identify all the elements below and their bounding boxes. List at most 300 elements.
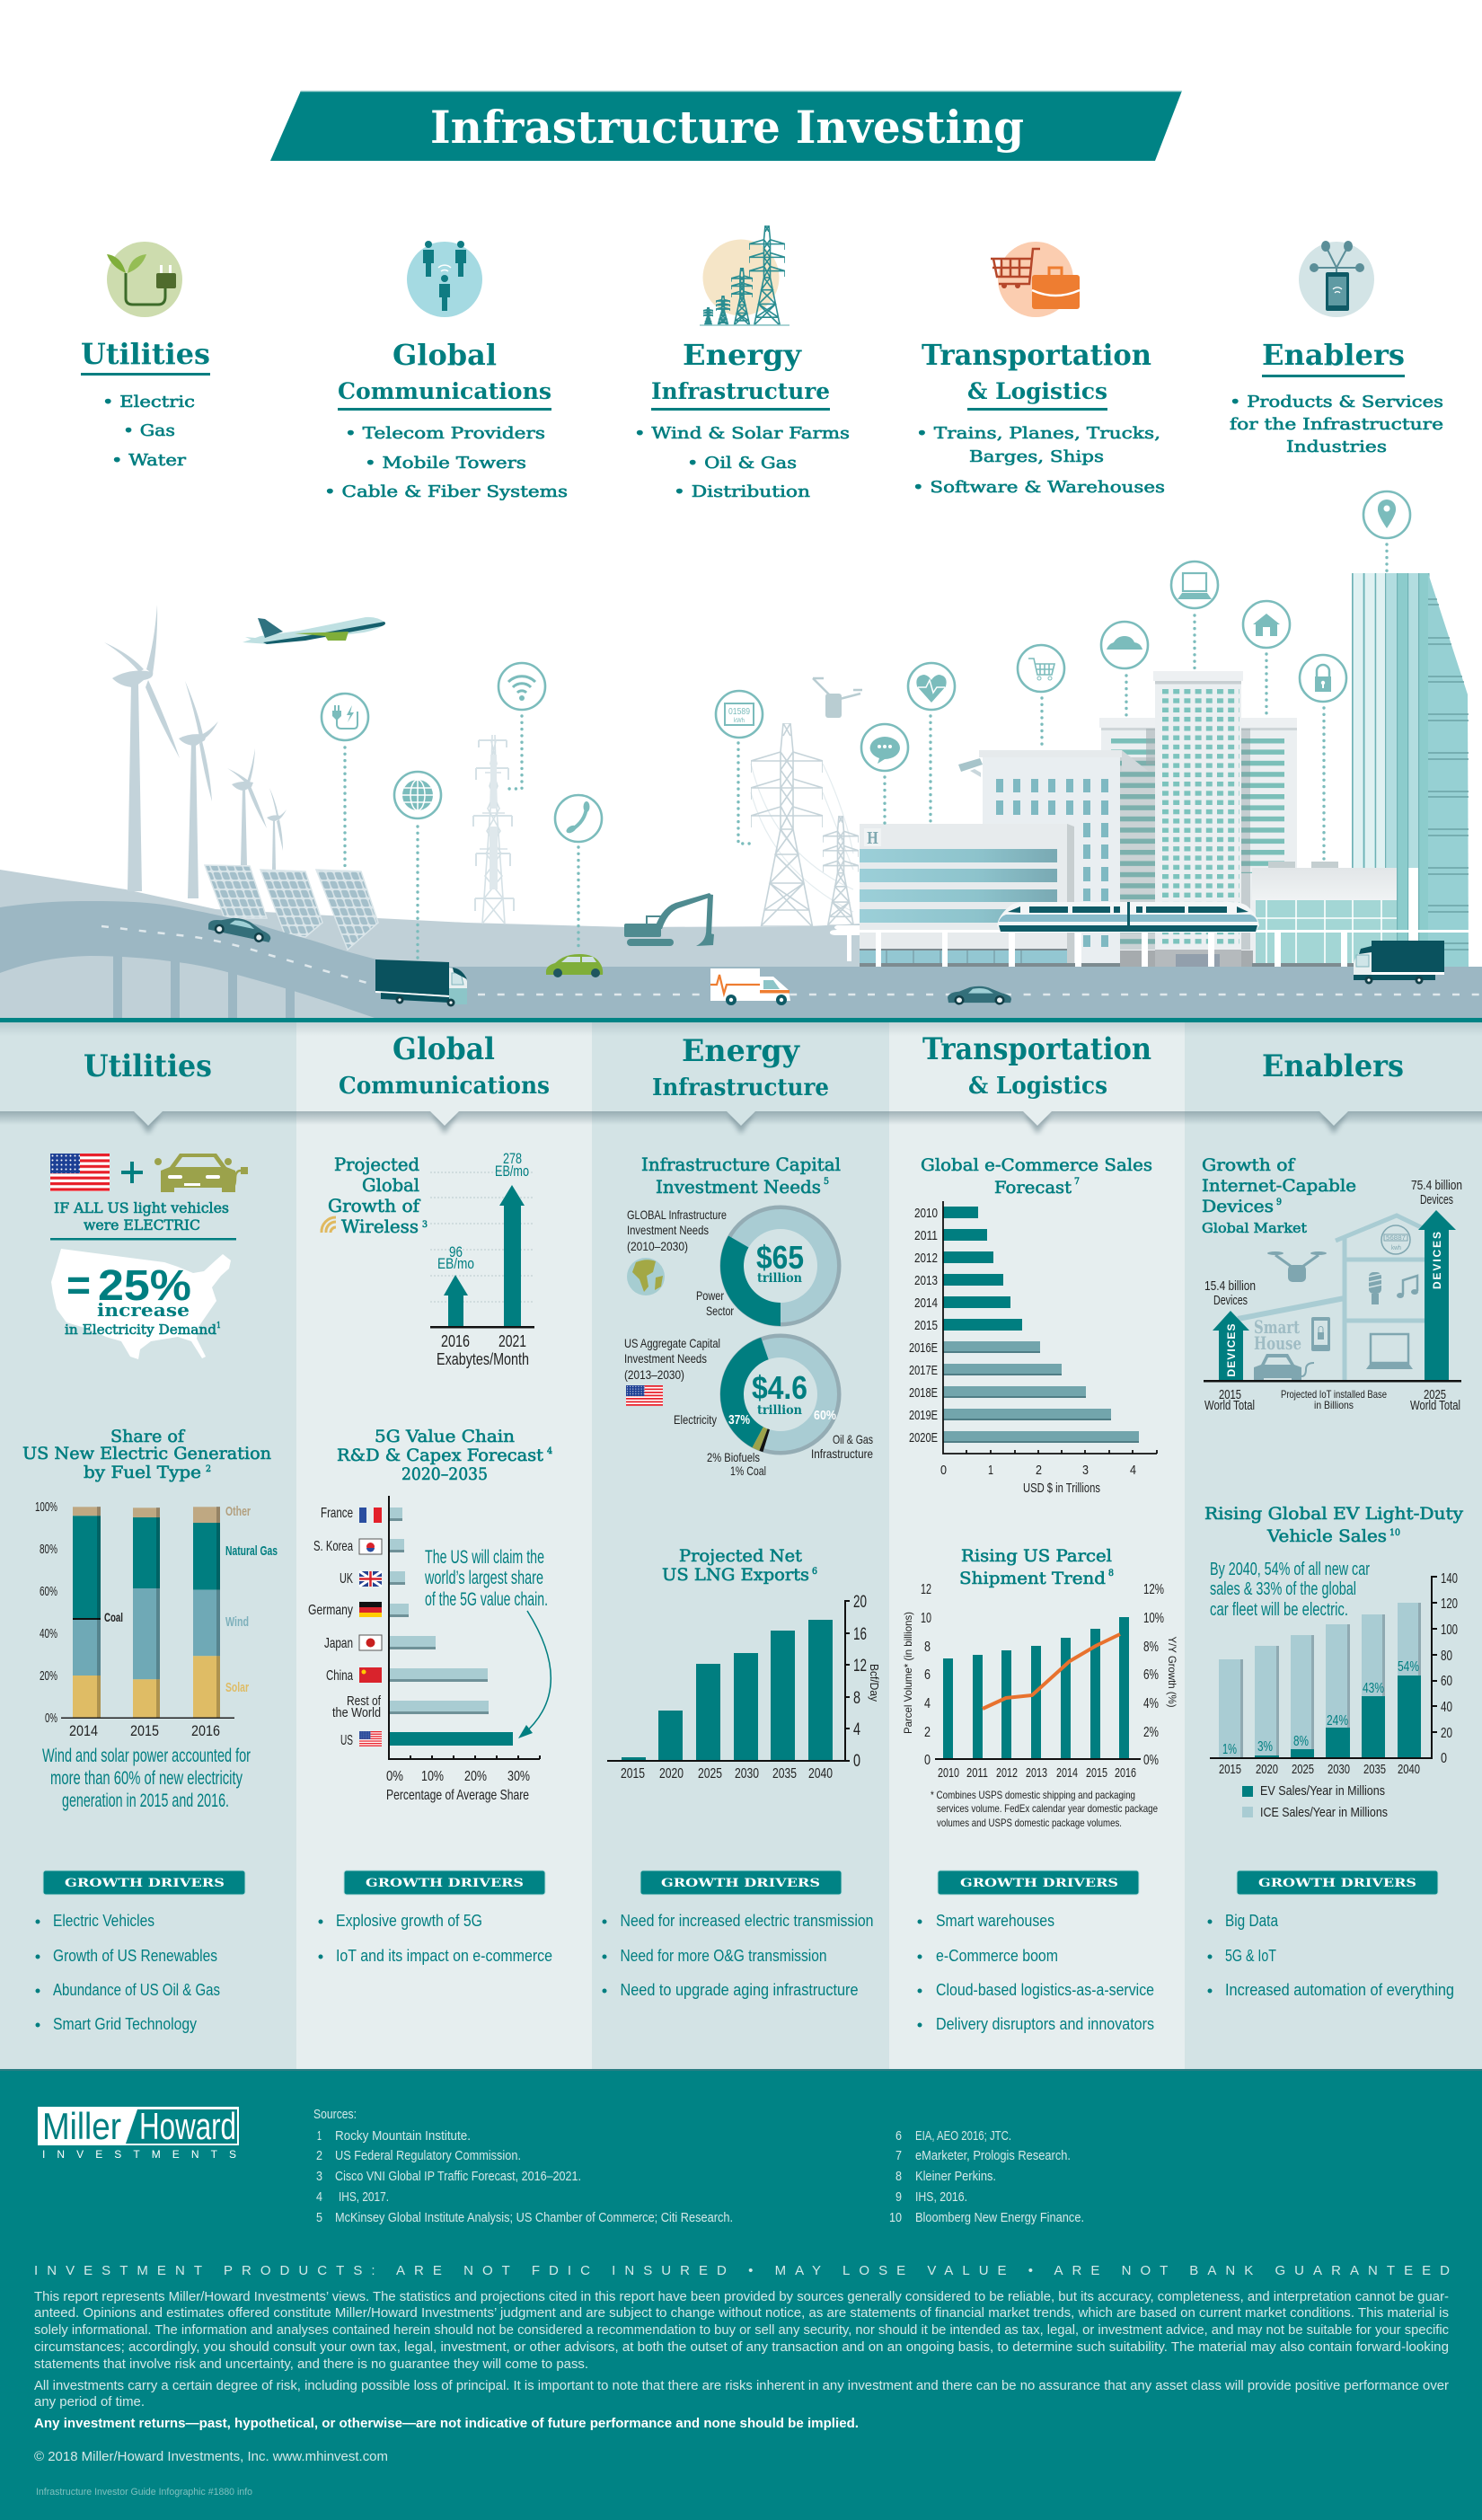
right axis labels: 6% xyxy=(1143,1667,1159,1683)
series labels and axis: 2014 xyxy=(69,1722,98,1739)
right axis labels: 2% xyxy=(1143,1725,1159,1740)
donut 2 labels: US Aggregate Capital xyxy=(624,1336,720,1350)
chart title: 4 xyxy=(547,1446,552,1456)
country labels: the World xyxy=(332,1705,381,1720)
logo: INVESTMENTS xyxy=(42,2148,236,2161)
vehicle: truck right xyxy=(1354,941,1444,985)
callout: By 2040, 54% of all new car xyxy=(1210,1560,1370,1579)
sources column 1: 2 xyxy=(316,2148,322,2163)
disclosure: All investments carry a certain degree of risk, including possible loss of principal. It is important to note that there are risks inherent in any investment and there can be no assurance that any asset class will provide positive performance over xyxy=(34,2379,1449,2393)
list: • Distribution xyxy=(674,482,810,501)
lock phone xyxy=(1311,1317,1330,1351)
chart title: Rising Global EV Light-Duty xyxy=(1204,1504,1463,1524)
list: Growth of US Renewables xyxy=(53,1947,217,1965)
chart labels: Devices xyxy=(1420,1192,1453,1207)
arrow chart: Exabytes/Month xyxy=(437,1350,529,1368)
icon: plus xyxy=(121,1162,143,1183)
chart title: US New Electric Generation xyxy=(22,1444,271,1463)
right axis labels: 0% xyxy=(1143,1753,1159,1768)
donut: US needs: 60% xyxy=(814,1408,836,1423)
label xyxy=(1254,1316,1301,1354)
callout xyxy=(424,1547,548,1610)
x axis labels: 2035 xyxy=(1363,1762,1386,1777)
arrow to US bar xyxy=(518,1611,551,1738)
column headings: Infrastructure xyxy=(652,1074,829,1101)
axis labels: 4 xyxy=(853,1720,860,1739)
left axis labels: 6 xyxy=(924,1667,931,1683)
arrows: DEVICES xyxy=(1431,1232,1443,1289)
badge xyxy=(938,1870,1139,1895)
country labels: Japan xyxy=(324,1636,353,1651)
y axis labels xyxy=(1441,1571,1458,1766)
axis labels: 2020 xyxy=(659,1766,684,1782)
left axis labels: 0 xyxy=(924,1753,931,1768)
share labels: 43% xyxy=(1363,1681,1384,1696)
growth line xyxy=(983,1634,1120,1709)
icon: US flag small xyxy=(626,1385,663,1406)
stat: increase xyxy=(97,1299,190,1321)
year labels: 2017E xyxy=(909,1363,938,1378)
label: House xyxy=(1254,1332,1301,1354)
bulb xyxy=(1369,1272,1381,1304)
series labels and axis: 2015 xyxy=(130,1722,159,1739)
sources column 1: 1 xyxy=(317,2128,322,2144)
axes xyxy=(389,1496,540,1759)
list: Smart Grid Technology xyxy=(53,2015,197,2033)
country labels: US xyxy=(340,1733,353,1748)
panel: parcel shipment trend xyxy=(902,1546,1178,1829)
chart title xyxy=(662,1546,817,1585)
smart meter xyxy=(1381,1225,1410,1254)
caption: IF ALL US light vehicles xyxy=(54,1199,229,1216)
x axis labels: 2020 xyxy=(1256,1762,1278,1777)
y axis labels: 100% xyxy=(35,1499,57,1515)
disclosure: This report represents Miller/Howard Investments’ views. The statistics and projections cited in this report have been provided by sources generally considered to be reliable, but its accuracy, completeness, and interpretation cannot be guar- xyxy=(34,2290,1449,2304)
list xyxy=(36,1912,220,2033)
chart title: Global e-Commerce Sales xyxy=(921,1155,1152,1175)
legend xyxy=(1242,1783,1388,1820)
right axis labels xyxy=(1143,1582,1178,1768)
axes xyxy=(607,1601,850,1761)
column backgrounds xyxy=(0,1022,1482,2069)
donut 2 labels: (2013–2030) xyxy=(624,1367,684,1382)
icon: pylons xyxy=(700,225,790,325)
badge xyxy=(1237,1870,1438,1895)
callout: of the 5G value chain. xyxy=(425,1589,548,1610)
legend: ICE Sales/Year in Millions xyxy=(1260,1805,1388,1820)
sector: Transportation and Logistics xyxy=(913,242,1165,497)
US map xyxy=(51,1249,231,1359)
chart title xyxy=(337,1427,552,1484)
donut 1 labels: Sector xyxy=(706,1304,734,1318)
list xyxy=(318,1912,552,1965)
axis labels: 8 xyxy=(853,1689,860,1708)
donut 1 labels: Power xyxy=(696,1288,724,1303)
x axis labels: USD $ in Trillions xyxy=(1023,1481,1100,1496)
callout xyxy=(1210,1560,1370,1620)
left axis labels: 4 xyxy=(924,1696,931,1711)
house illustration xyxy=(1238,1216,1425,1381)
chart title: Internet-Capable xyxy=(1202,1176,1356,1196)
column headings xyxy=(84,1031,1404,1101)
list: • Wind & Solar Farms xyxy=(634,424,850,443)
chart labels: World Total xyxy=(1204,1398,1255,1413)
list: Big Data xyxy=(1225,1912,1279,1930)
share labels: 1% xyxy=(1222,1742,1237,1757)
list xyxy=(913,424,1165,497)
left axis labels: 10 xyxy=(921,1611,931,1626)
y axis labels: 60 xyxy=(1441,1674,1452,1689)
sector: Utilities xyxy=(81,242,210,470)
series labels and axis: 2016 xyxy=(191,1722,220,1739)
country labels: S. Korea xyxy=(313,1539,353,1554)
chart labels: 15.4 billion xyxy=(1204,1278,1256,1294)
left axis labels: Parcel Volume* (in billions) xyxy=(902,1612,914,1734)
list: e-Commerce boom xyxy=(936,1947,1058,1965)
panel: 5G value chain xyxy=(308,1427,552,1803)
series labels and axis: Natural Gas xyxy=(225,1543,278,1559)
bar 2015 xyxy=(133,1508,160,1718)
logo: Howard xyxy=(139,2105,236,2147)
chart title: 9 xyxy=(1276,1198,1282,1207)
donut 2 labels: 2% Biofuels xyxy=(707,1450,760,1464)
pin: laptop xyxy=(1171,561,1218,668)
badge: GROWTH DRIVERS xyxy=(960,1877,1118,1890)
drone xyxy=(1267,1251,1327,1282)
column headings: Global xyxy=(393,1031,495,1067)
y axis labels: 60% xyxy=(40,1584,57,1599)
column headings: Energy xyxy=(682,1033,800,1069)
list: Need for increased electric transmission xyxy=(620,1912,873,1930)
donut 2 labels: Investment Needs xyxy=(624,1351,707,1366)
pin: meter: 01589 xyxy=(728,707,750,717)
left axis labels: 2 xyxy=(924,1725,931,1740)
donut: US needs xyxy=(720,1336,839,1453)
pin: cloud xyxy=(1101,622,1148,716)
arrow chart: EB/mo xyxy=(437,1255,474,1272)
chart title: 10 xyxy=(1389,1528,1400,1538)
chart title: 6 xyxy=(812,1567,817,1577)
donut: global needs: $65 xyxy=(756,1239,804,1276)
list: Industries xyxy=(1286,438,1387,456)
pin: meter xyxy=(716,691,763,844)
arrow chart: 278 xyxy=(503,1150,522,1167)
chart title: by Fuel Type xyxy=(84,1463,201,1482)
callout: sales & 33% of the global xyxy=(1210,1579,1356,1599)
chart title: 5G Value Chain xyxy=(375,1427,515,1446)
chart labels: 2025 xyxy=(1424,1387,1446,1402)
road and bridge xyxy=(0,901,1482,1022)
heading: Global xyxy=(393,338,497,372)
donut 2 labels: 1% Coal xyxy=(730,1463,766,1478)
arrow chart: 96 xyxy=(449,1243,463,1260)
heading: Energy xyxy=(683,338,802,372)
disclosure: Any investment returns—past, hypothetical, or otherwise—are not indicative of future performance and none should be implied. xyxy=(34,2417,859,2431)
music note xyxy=(1397,1276,1418,1298)
list: • Electric xyxy=(102,393,195,411)
y axis labels: 40% xyxy=(40,1626,57,1641)
list xyxy=(602,1912,873,1999)
sources column 2: EIA, AEO 2016; JTC. xyxy=(915,2128,1011,2144)
elevated track xyxy=(830,925,1469,971)
sources column 1: 4 xyxy=(316,2189,322,2205)
list: Delivery disruptors and innovators xyxy=(936,2015,1154,2033)
y axis labels: 0% xyxy=(45,1711,57,1726)
icon: connected phone xyxy=(1299,241,1374,317)
x axis labels: 2030 xyxy=(1328,1762,1350,1777)
chart labels: in Billions xyxy=(1314,1399,1354,1411)
donut 1 labels: Investment Needs xyxy=(627,1223,709,1237)
x axis labels: 2012 xyxy=(996,1765,1018,1781)
list: Need to upgrade aging infrastructure xyxy=(620,1981,859,1999)
logo xyxy=(38,2105,239,2161)
badge xyxy=(43,1870,245,1895)
x axis labels: 4 xyxy=(1130,1463,1136,1478)
laptop xyxy=(1366,1334,1413,1369)
axis labels: 0 xyxy=(853,1752,860,1771)
airplane xyxy=(243,617,385,644)
stat: 25% xyxy=(98,1262,191,1310)
pin: lock xyxy=(1300,655,1346,861)
chart title: Rising US Parcel xyxy=(961,1546,1112,1566)
list: • Telecom Providers xyxy=(345,424,545,443)
list: Explosive growth of 5G xyxy=(336,1912,482,1930)
solar panels xyxy=(205,865,378,950)
takeaway: Wind and solar power accounted for xyxy=(42,1746,251,1766)
list: • Products & Services xyxy=(1230,393,1443,411)
cell tower xyxy=(473,735,514,924)
axis labels: 2015 xyxy=(621,1766,645,1782)
chart title xyxy=(959,1546,1114,1588)
arrows xyxy=(1204,1210,1461,1382)
bridge pillars xyxy=(113,952,295,1018)
footnote: * Combines USPS domestic shipping and packaging xyxy=(931,1789,1135,1801)
icon: people network xyxy=(407,241,482,317)
takeaway: generation in 2015 and 2016. xyxy=(62,1791,229,1811)
badge: GROWTH DRIVERS xyxy=(1258,1877,1416,1890)
bars xyxy=(389,1508,513,1746)
x axis labels: 0% xyxy=(386,1769,403,1784)
list: for the Infrastructure xyxy=(1230,415,1443,434)
x axis labels: 2 xyxy=(1036,1463,1042,1478)
badge xyxy=(640,1870,842,1895)
pin: wifi xyxy=(498,663,545,789)
chart title: Devices xyxy=(1202,1197,1274,1216)
right axis labels: 8% xyxy=(1143,1640,1159,1655)
donut 2 labels xyxy=(624,1336,873,1478)
chart labels xyxy=(1204,1178,1462,1413)
chart title: Investment Needs xyxy=(656,1176,821,1198)
chart title: Growth of xyxy=(1202,1155,1296,1175)
back hill xyxy=(0,870,862,1018)
sources column 1: US Federal Regulatory Commission. xyxy=(335,2148,521,2163)
panel: wireless growth xyxy=(322,1150,534,1368)
stat: in Electricity Demand xyxy=(65,1322,216,1338)
sector: Global Communications: Communications xyxy=(338,378,551,404)
column headings: Communications xyxy=(339,1073,550,1100)
growth drivers: Enablers xyxy=(1207,1870,1454,1999)
list xyxy=(918,1912,1154,2033)
pin: heart xyxy=(908,663,955,823)
sources column 2: 6 xyxy=(895,2128,902,2144)
badge xyxy=(344,1870,545,1895)
icon: cart and briefcase xyxy=(991,242,1080,317)
icon: electric car xyxy=(154,1154,248,1192)
pin: globe xyxy=(394,772,441,959)
vehicle: delivery truck xyxy=(375,959,467,1006)
chart title: Share of xyxy=(110,1427,186,1446)
axis labels: Bcf/Day xyxy=(868,1664,881,1702)
list: • Oil & Gas xyxy=(687,454,797,473)
list: Increased automation of everything xyxy=(1225,1981,1454,1999)
x axis labels xyxy=(938,1765,1136,1781)
right axis labels: Y/Y Growth (%) xyxy=(1166,1637,1178,1707)
logo: Miller xyxy=(42,2105,121,2147)
chart labels: 75.4 billion xyxy=(1411,1178,1462,1193)
sector: Energy Infrastructure xyxy=(634,225,850,501)
bars xyxy=(622,1620,833,1761)
takeaway xyxy=(42,1746,251,1811)
chart title: US LNG Exports xyxy=(662,1565,809,1585)
ICE bars xyxy=(1219,1603,1421,1758)
pin: chat xyxy=(861,724,908,824)
panel: EV vehicle sales xyxy=(1204,1504,1463,1820)
column headings: & Logistics xyxy=(968,1073,1107,1100)
callout: car fleet will be electric. xyxy=(1210,1600,1348,1620)
disclosure: circumstances; accordingly, you should consult your own tax, legal, investment, or other advisors, at both the outset of any transaction and on an ongoing basis, to determine such suitability. The material may also contain forward-looking xyxy=(34,2340,1449,2355)
pylons and wires xyxy=(751,723,859,926)
sources column 1: Sources: xyxy=(313,2107,357,2122)
left axis labels: 12 xyxy=(921,1582,931,1597)
smart meter: 56887 xyxy=(1386,1235,1406,1242)
column headings: Transportation xyxy=(922,1031,1151,1067)
series labels and axis: Coal xyxy=(104,1610,123,1624)
excavator xyxy=(624,893,714,946)
x axis labels: 2025 xyxy=(1292,1762,1314,1777)
share labels: 8% xyxy=(1293,1734,1309,1749)
donut: global needs: trillion xyxy=(757,1271,802,1286)
column headings: Enablers xyxy=(1262,1048,1404,1084)
list: Abundance of US Oil & Gas xyxy=(53,1981,220,1999)
x axis labels: 1 xyxy=(988,1463,993,1478)
list: • Water xyxy=(111,451,186,470)
footnote: services volume. FedEx calendar year domestic package xyxy=(937,1802,1158,1815)
wind turbines xyxy=(104,605,287,898)
list xyxy=(1207,1912,1454,1999)
list: IoT and its impact on e-commerce xyxy=(336,1947,552,1965)
series labels and axis: Solar xyxy=(225,1680,249,1695)
right axis labels: 12% xyxy=(1143,1582,1164,1597)
list: Electric Vehicles xyxy=(53,1912,154,1930)
growth drivers: Global Communications xyxy=(318,1870,552,1965)
disclosure: anteed. Opinions and estimates offered constitute Miller/Howard Investments’ judgment and are subject to change without notice, as are statements of financial market trends, which are based on current market conditions. This material is xyxy=(34,2306,1449,2321)
x axis labels xyxy=(386,1769,530,1803)
disclosure: solely informational. The information and analyses contained herein should not be considered a recommendation to buy or sell any security, nor should it be intended as tax, legal, or investment advice, and may not be suitable for your specific xyxy=(34,2323,1449,2338)
stat: = xyxy=(66,1262,91,1310)
sector: Global Communications xyxy=(324,241,568,501)
list xyxy=(1230,393,1443,456)
x axis labels: 2040 xyxy=(1398,1762,1420,1777)
sources column 1: Cisco VNI Global IP Traffic Forecast, 2016–2021. xyxy=(335,2169,581,2184)
growth drivers: Transportation and Logistics xyxy=(918,1870,1154,2033)
arrow chart: EB/mo xyxy=(495,1163,529,1180)
axis labels: 20 xyxy=(853,1593,867,1612)
donut: US needs: 37% xyxy=(728,1412,750,1428)
list xyxy=(324,424,568,501)
chart title: Forecast xyxy=(994,1178,1072,1198)
sources column 1 xyxy=(313,2107,733,2225)
y axis labels xyxy=(35,1499,57,1726)
y axis labels: 80% xyxy=(40,1542,57,1557)
title banner xyxy=(270,91,1182,161)
chart title xyxy=(1202,1155,1356,1236)
callout: world’s largest share xyxy=(424,1568,543,1588)
left axis labels: 8 xyxy=(924,1640,931,1655)
sources column 1: IHS, 2017. xyxy=(339,2189,389,2205)
year labels: 2018E xyxy=(909,1385,938,1401)
smart meter: kwh xyxy=(1391,1245,1401,1251)
vehicle: car on bridge xyxy=(207,913,273,945)
list: Cloud-based logistics-as-a-service xyxy=(936,1981,1154,1999)
sources column 2: 8 xyxy=(895,2169,902,2184)
list: Need for more O&G transmission xyxy=(620,1947,826,1965)
donut: US needs: trillion xyxy=(757,1403,802,1418)
investment products banner: INVESTMENT PRODUCTS: ARE NOT FDIC INSURED • MAY LOSE VALUE • ARE NOT BANK GUARANTEED xyxy=(34,2263,1450,2278)
year labels: 2019E xyxy=(909,1408,938,1423)
flags xyxy=(359,1508,382,1746)
y axis labels: 100 xyxy=(1441,1623,1458,1638)
label: Smart xyxy=(1254,1316,1301,1338)
list: 5G & IoT xyxy=(1225,1947,1276,1965)
disclosure: any period of time. xyxy=(34,2395,145,2409)
legend: EV Sales/Year in Millions xyxy=(1260,1783,1385,1799)
arrow chart: 2021 xyxy=(498,1332,526,1350)
chart title: 5 xyxy=(824,1177,829,1187)
list: • Cable & Fiber Systems xyxy=(324,482,568,501)
footnote: volumes and USPS domestic package volumes. xyxy=(937,1817,1122,1829)
country labels: Rest of xyxy=(347,1693,382,1709)
chart labels: Devices xyxy=(1213,1293,1248,1308)
x axis labels xyxy=(940,1463,1136,1496)
x axis labels: 10% xyxy=(421,1769,444,1784)
stat: 1 xyxy=(216,1322,221,1331)
list: • Gas xyxy=(123,421,175,440)
heading: Utilities xyxy=(81,337,210,371)
chart title: 7 xyxy=(1074,1177,1080,1187)
chart title xyxy=(1204,1504,1463,1546)
chart title: Projected Net xyxy=(679,1546,802,1566)
chart labels: 2015 xyxy=(1219,1387,1241,1402)
sources column 1: 5 xyxy=(316,2210,322,2225)
heading: Enablers xyxy=(1262,338,1405,372)
illustration: infrastructure landscape xyxy=(0,491,1482,1022)
icon: leaf and plug xyxy=(107,242,182,317)
footer xyxy=(0,2069,1482,2520)
x axis labels: 0 xyxy=(940,1463,947,1478)
donut 1 labels xyxy=(627,1207,734,1318)
share labels: 54% xyxy=(1398,1659,1419,1675)
y axis labels: 20% xyxy=(40,1668,57,1684)
chart title: Global Market xyxy=(1202,1220,1307,1236)
year labels: 2013 xyxy=(914,1273,938,1288)
caption xyxy=(54,1199,229,1233)
x axis labels: Percentage of Average Share xyxy=(386,1788,529,1803)
axis labels: 2025 xyxy=(698,1766,722,1782)
country labels xyxy=(308,1506,382,1748)
chart title: Global xyxy=(362,1174,419,1196)
takeaway: more than 60% of new electricity xyxy=(50,1768,243,1789)
badge: GROWTH DRIVERS xyxy=(65,1877,225,1890)
